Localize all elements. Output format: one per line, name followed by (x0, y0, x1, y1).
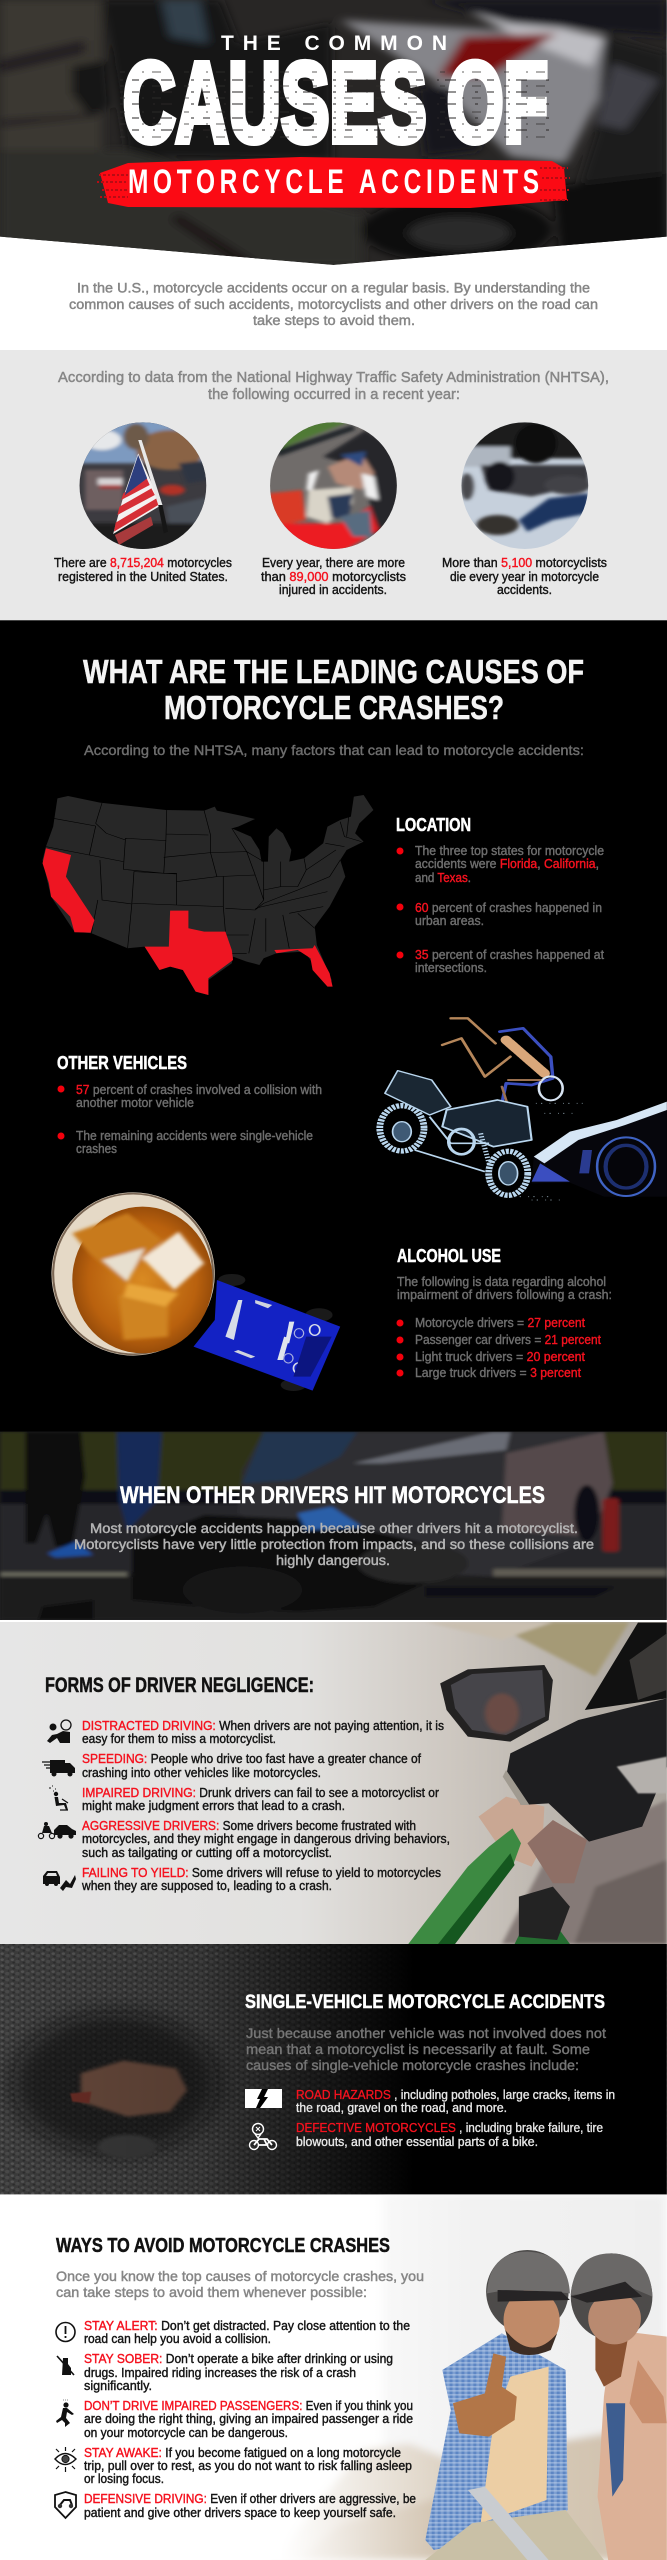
body text: causes of single-vehicle motorcycle crashes include: (246, 2057, 579, 2073)
rider skeleton (442, 1018, 563, 1107)
icon: defective motorcycle (250, 2124, 276, 2150)
body text: Most motorcycle accidents happen because other drivers hit a motorcyclist. (90, 1521, 578, 1536)
negligence list: AGGRESSIVE DRIVERS: Some drivers become frustrated with (82, 1819, 416, 1833)
alcohol use facts: Large truck drivers = 3 percent (415, 1366, 582, 1380)
heading: forms of driver negligence: FORMS OF DRIVER NEGLIGENCE: (45, 1673, 314, 1697)
intro text: In the U.S., motorcycle accidents occur on a regular basis. By understanding the (77, 281, 590, 296)
intro text (56, 2268, 424, 2300)
x-ray illustration: motorcycle hitting car (380, 1018, 667, 1200)
negligence list: easy for them to miss a motorcyclist. (82, 1732, 276, 1746)
location facts: 35 percent of crashes happened at (415, 948, 605, 962)
icon: failing to yield crash (43, 1871, 76, 1891)
caption: registered motorcycles: There are 8,715,204 motorcycles (54, 556, 232, 570)
tips list: STAY SOBER: Don’t operate a bike after drinking or using (84, 2352, 393, 2366)
US states (43, 795, 373, 995)
caption: motorcyclist deaths: die every year in motorcycle (450, 570, 599, 584)
icon: distracted driver (47, 1720, 71, 1743)
window frame (585, 1623, 667, 1710)
body text: highly dangerous. (276, 1553, 390, 1568)
other vehicles facts: 57 percent of crashes involved a collision with (76, 1083, 322, 1097)
caption: registered motorcycles (54, 556, 232, 584)
heading: other vehicles: OTHER VEHICLES (57, 1053, 187, 1073)
location facts: accidents were Florida, California, (415, 857, 599, 871)
tips list: DEFENSIVE DRIVING: Even if other drivers are aggressive, be (84, 2492, 416, 2506)
icon: impaired driver (49, 1786, 68, 1810)
tips list: DON’T DRIVE IMPAIRED PASSENGERS: Even if you think you (84, 2399, 413, 2413)
heading: alcohol use: ALCOHOL USE (397, 1246, 501, 1266)
other vehicles facts: The remaining accidents were single-vehicle (76, 1129, 313, 1143)
statistics intro text: the following occurred in a recent year: (208, 387, 460, 403)
panel: leading causes (0, 620, 667, 1432)
hero photo: crashed motorcycle (0, 0, 667, 267)
location facts: intersections. (415, 961, 487, 975)
photo circle: injured rider (268, 420, 400, 553)
location facts (396, 815, 605, 975)
man (425, 2250, 604, 2560)
caption: injured motorcyclists (261, 556, 406, 597)
highlighted states: California, Texas, Florida (43, 848, 333, 995)
heading: location: LOCATION (396, 815, 471, 835)
alcohol use facts: Light truck drivers = 20 percent (415, 1350, 586, 1364)
motorcycle (380, 1071, 532, 1195)
red brush stroke behind subtitle (97, 157, 570, 208)
photo: driver with bottle (0, 1622, 667, 1944)
tips list: drugs. Impaired riding increases the risk of a crash (84, 2366, 356, 2380)
photo circle: motorcycles with flag (77, 420, 208, 553)
intro text: Once you know the top causes of motorcycle crashes, you (56, 2268, 424, 2284)
toy car (194, 1274, 340, 1391)
icon: shield with motorcycle (55, 2492, 76, 2518)
icon: road hazard (245, 2089, 282, 2108)
section heading (83, 653, 584, 726)
alcohol use facts: Motorcycle drivers = 27 percent (415, 1316, 586, 1330)
road hazards text: the road, gravel on the road, and more. (296, 2101, 507, 2115)
location facts: and Texas. (415, 871, 471, 885)
side mirror (440, 1665, 553, 1742)
heading: single-vehicle motorcycle accidents: SINGLE-VEHICLE MOTORCYCLE ACCIDENTS (245, 1991, 605, 2013)
other vehicles facts: crashes (76, 1142, 117, 1156)
tips list: or losing focus. (84, 2472, 164, 2486)
negligence list: motorcycles, and they might engage in dangerous driving behaviors, (82, 1832, 450, 1846)
tips list: are doing the right thing, giving an impaired passenger a ride (84, 2412, 413, 2426)
illustration: whisky glass with toy car (51, 1192, 340, 1391)
other vehicles facts: another motor vehicle (76, 1096, 194, 1110)
road hazards text: ROAD HAZARDS , including potholes, large cracks, items in (296, 2088, 615, 2102)
negligence list: IMPAIRED DRIVING: Drunk drivers can fail to see a motorcyclist or (82, 1786, 439, 1800)
other vehicles facts (57, 1053, 322, 1156)
tips list: significantly. (84, 2379, 152, 2393)
heading: ways to avoid motorcycle crashes: WAYS TO AVOID MOTORCYCLE CRASHES (56, 2234, 390, 2257)
location facts: urban areas. (415, 914, 484, 928)
caption: motorcyclist deaths: More than 5,100 motorcyclists (442, 556, 607, 570)
body text (74, 1521, 594, 1568)
tips list (84, 2319, 416, 2520)
panel: forms of driver negligence (0, 1622, 667, 1944)
caption: injured motorcyclists: than 89,000 motorcyclists (261, 570, 406, 584)
alcohol use facts: impairment of drivers following a crash: (397, 1288, 612, 1302)
caption: injured motorcyclists: Every year, there are more (262, 556, 405, 570)
white notch (0, 237, 667, 350)
negligence list: crashing into other vehicles like motorcycles. (82, 1766, 321, 1780)
subtitle: motorcycle accidents: MOTORCYCLE ACCIDENTS (128, 163, 539, 201)
caption: motorcyclist deaths (442, 556, 607, 597)
panel: NHTSA statistics (0, 350, 667, 620)
intro text: can take steps to avoid them whenever possible: (56, 2284, 367, 2300)
negligence list: DISTRACTED DRIVING: When drivers are not paying attention, it is (82, 1719, 444, 1733)
location facts: 60 percent of crashes happened in (415, 901, 602, 915)
title line: the common: THE COMMON (221, 32, 447, 55)
tips list: STAY ALERT: Don’t get distracted. Pay close attention to the (84, 2319, 410, 2333)
icon: alert (56, 2322, 75, 2342)
panel: single-vehicle motorcycle accidents (0, 1944, 667, 2195)
whisky glass (51, 1192, 215, 1356)
negligence list: FAILING TO YIELD: Some drivers will refuse to yield to motorcycles (82, 1866, 441, 1880)
arm in dark sleeve (506, 1698, 667, 1842)
photo: smiling riders (0, 2194, 667, 2560)
statistics intro text: According to data from the National Highway Traffic Safety Administration (NHTSA), (58, 370, 609, 386)
body text: Motorcyclists have very little protection from impacts, and so these collisions are (74, 1537, 594, 1552)
icon: no bottle (57, 2356, 74, 2375)
car (532, 1102, 667, 1197)
woman (571, 2253, 667, 2560)
intro text (69, 281, 598, 328)
icon: eye (55, 2447, 76, 2472)
icon: aggressive car and motorcycle (38, 1822, 76, 1839)
statistics intro text (58, 370, 609, 403)
panel: ways to avoid motorcycle crashes (0, 2194, 667, 2560)
tips list: STAY AWAKE: If you become fatigued on a long motorcycle (84, 2446, 401, 2460)
location facts: The three top states for motorcycle (415, 844, 604, 858)
intro text: common causes of such accidents, motorcyclists and other drivers on the road can (69, 297, 598, 312)
defective motorcycles text (296, 2121, 603, 2149)
hero banner (0, 0, 667, 265)
state borders (46, 803, 362, 953)
body text: Just because another vehicle was not involved does not (246, 2025, 606, 2041)
photo circle: fallen rider (459, 420, 591, 552)
negligence list: when they are supposed to, leading to a crash. (81, 1879, 332, 1893)
panel: when other drivers hit motorcycles (0, 1420, 667, 1620)
defective motorcycles text: DEFECTIVE MOTORCYCLES , including brake failure, tire (296, 2121, 603, 2135)
negligence list: SPEEDING: People who drive too fast have a greater chance of (82, 1752, 421, 1766)
defective motorcycles text: blowouts, and other essential parts of a bike. (296, 2135, 538, 2149)
road hazards text (296, 2088, 615, 2115)
map of the United States (43, 795, 373, 995)
icon: speeding truck (42, 1760, 75, 1776)
negligence list: might make judgment errors that lead to a crash. (82, 1799, 345, 1813)
tips list: road can help you avoid a collision. (84, 2332, 271, 2346)
alcohol use facts: The following is data regarding alcohol (397, 1275, 606, 1289)
caption: motorcyclist deaths: accidents. (497, 583, 552, 597)
alcohol use facts (396, 1246, 612, 1380)
photo: crash scene (0, 1420, 667, 1620)
body text (246, 2025, 606, 2073)
tips list: on your motorcycle can be dangerous. (84, 2426, 288, 2440)
tips list: patient and give other drivers space to keep yourself safe. (84, 2506, 396, 2520)
icon: stumbling person (56, 2400, 74, 2427)
section heading: MOTORCYCLE CRASHES? (164, 689, 504, 726)
tips list: trip, pull over to rest, as you do not want to risk falling asleep (84, 2459, 412, 2473)
caption: registered motorcycles: registered in the United States. (58, 570, 228, 584)
section intro text: According to the NHTSA, many factors that can lead to motorcycle accidents: (84, 742, 584, 758)
alcohol use facts: Passenger car drivers = 21 percent (415, 1333, 601, 1347)
photo: pothole in asphalt (0, 1944, 667, 2195)
debris particles (515, 1103, 583, 1200)
body text: mean that a motorcyclist is necessarily at fault. Some (246, 2041, 590, 2057)
caption: injured motorcyclists: injured in accidents. (279, 583, 387, 597)
bottle (408, 1828, 521, 1944)
hand (478, 1797, 544, 1867)
negligence list: such as tailgating or cutting off a motorcyclist. (82, 1846, 332, 1860)
negligence list (81, 1719, 450, 1893)
heading: when other drivers hit motorcycles: WHEN OTHER DRIVERS HIT MOTORCYCLES (120, 1482, 545, 1509)
intro text: take steps to avoid them. (253, 313, 415, 328)
